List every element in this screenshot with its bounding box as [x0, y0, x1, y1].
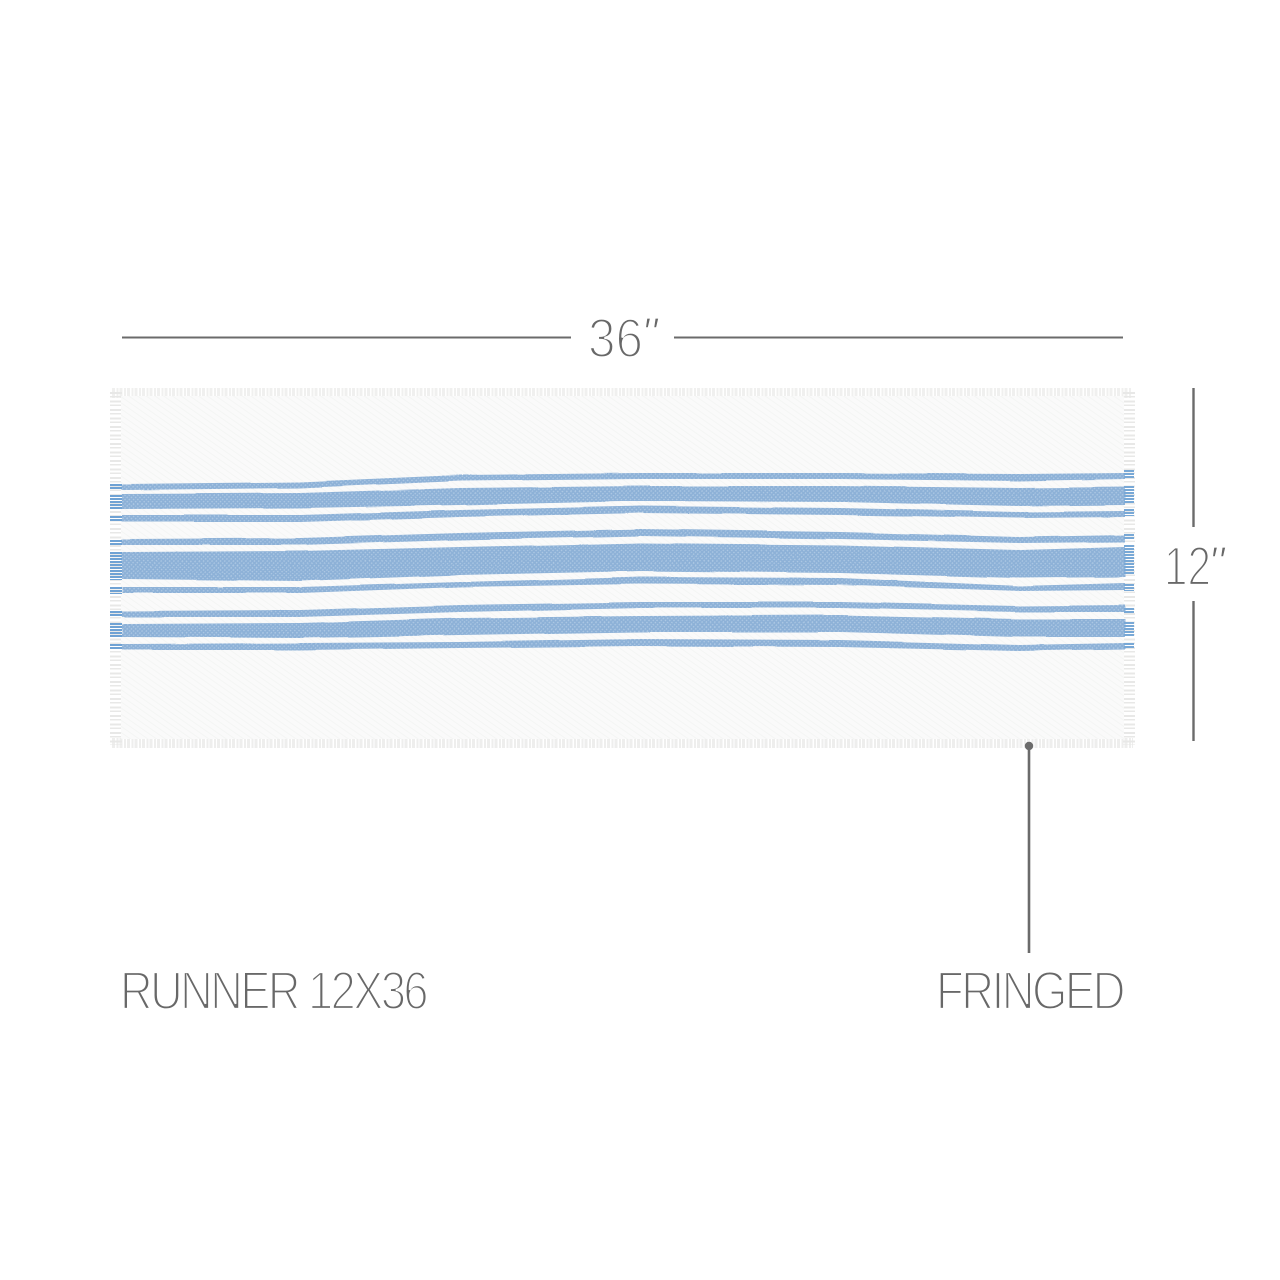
height dimension: 12 inches: 12 [1164, 535, 1211, 597]
width dimension: 36 inches [122, 307, 1123, 369]
blue fringe tufts right [1124, 470, 1134, 649]
height dimension: 12 inches [1164, 388, 1227, 741]
label: runner size: RUNNER 12X36 [120, 961, 427, 1021]
width dimension: 36 inches: 36 [588, 307, 643, 369]
label: fringed: FRINGED [936, 961, 1124, 1021]
cloth body [121, 396, 1124, 739]
fringe edges [112, 392, 1133, 745]
table runner [112, 392, 1133, 745]
blue stripes [122, 473, 1125, 651]
callout pointer [1025, 742, 1033, 953]
blue fringe tufts left [110, 484, 122, 650]
height dimension: 12 inches: " [1208, 537, 1227, 589]
width dimension: 36 inches: " [641, 308, 660, 360]
